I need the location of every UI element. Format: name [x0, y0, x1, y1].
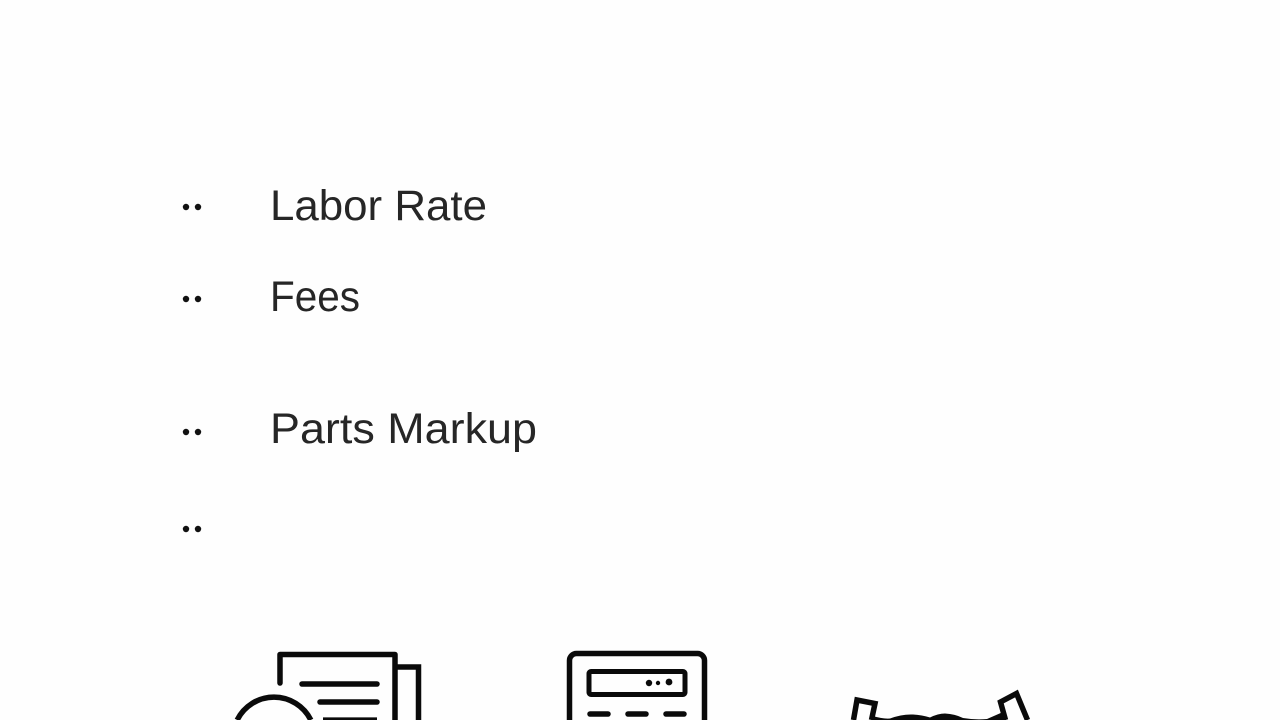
icon: calculator	[570, 654, 704, 720]
list item: Labor Rate: Labor Rate	[270, 182, 487, 230]
icon: handshake	[854, 694, 1028, 720]
list item: Fees: Fees	[270, 273, 360, 321]
list item: Parts Markup: Parts Markup	[270, 405, 537, 453]
list item: empty bullet	[183, 526, 201, 532]
list item: Fees	[183, 273, 360, 321]
list item: Labor Rate	[183, 182, 487, 230]
icon: documents with magnifier	[237, 654, 418, 720]
